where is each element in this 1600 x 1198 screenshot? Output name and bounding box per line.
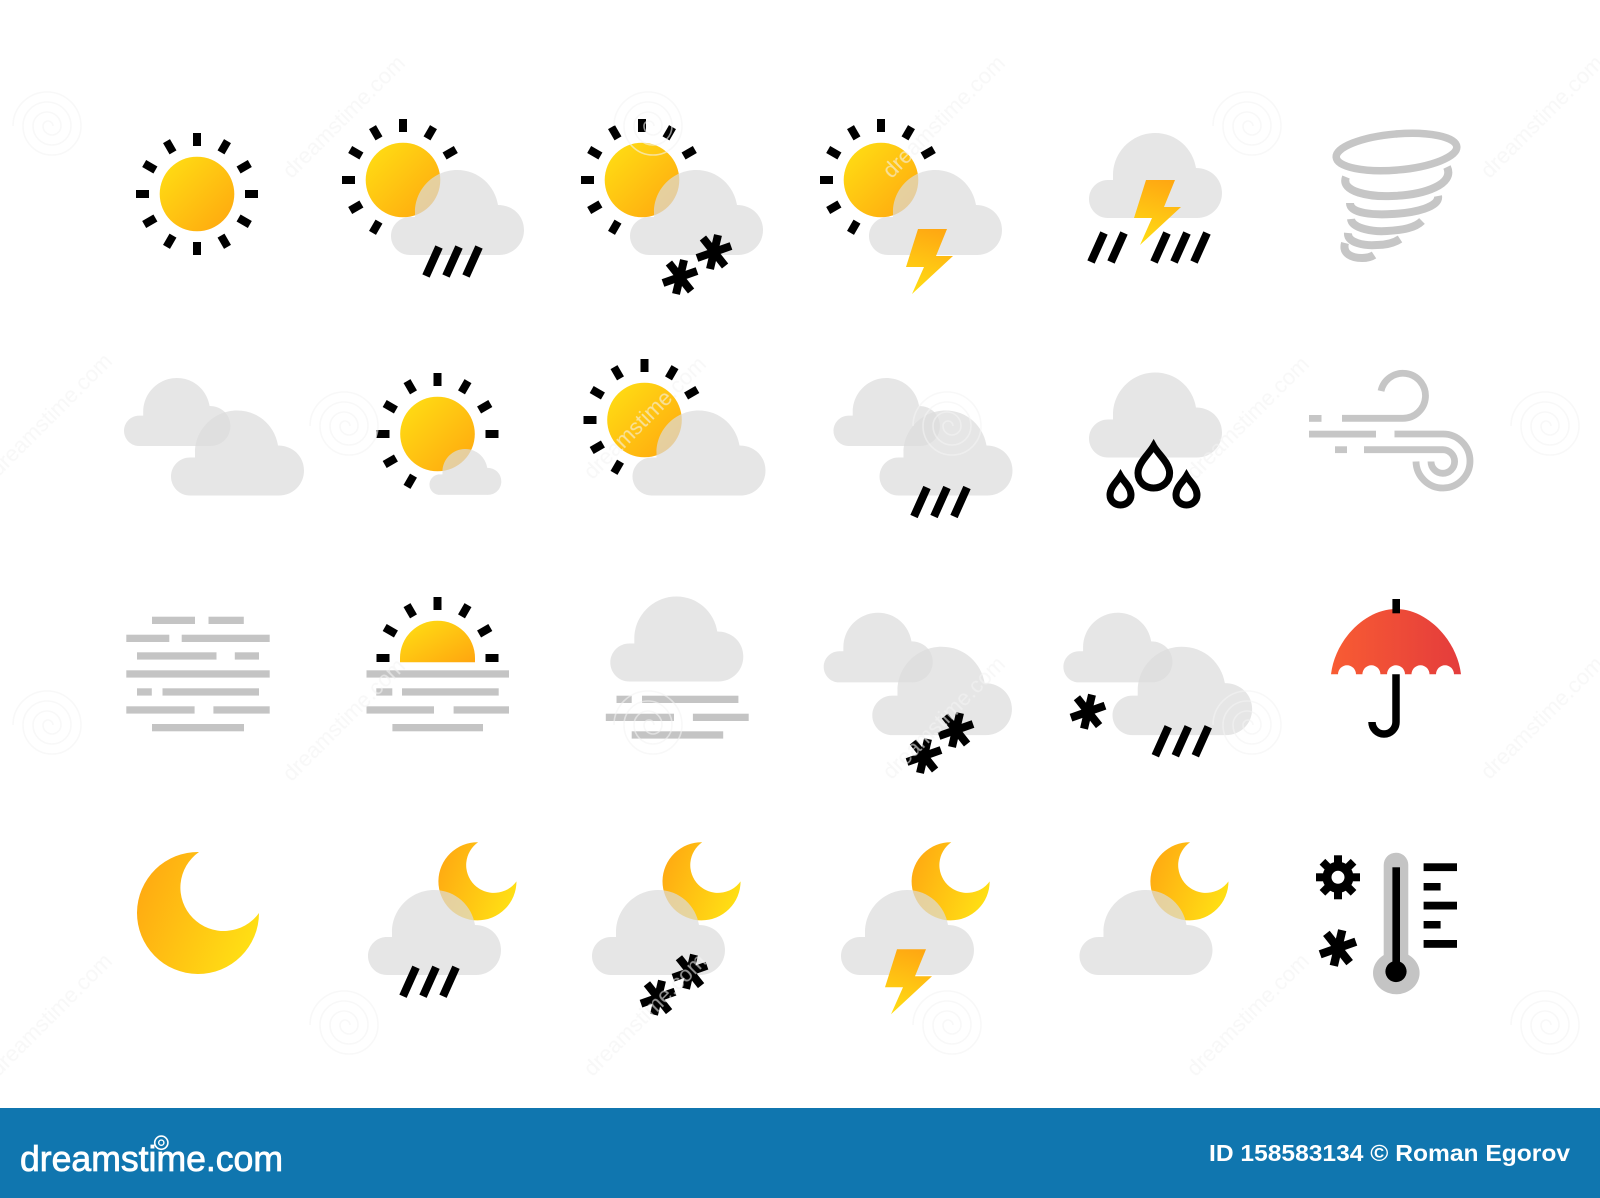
watermarks: dreamstime.com — [578, 351, 711, 484]
icon: sun behind cloud with snow — [581, 119, 763, 294]
icon: crescent moon — [137, 852, 259, 974]
icon: thunderstorm with rain — [1089, 133, 1222, 262]
icon: umbrella — [1331, 599, 1461, 734]
watermarks: dreamstime.com — [877, 651, 1010, 784]
watermarks: dreamstime.com — [1181, 351, 1314, 484]
icon: cloud with rain drops — [1089, 372, 1222, 505]
icon: moon behind cloud — [1080, 842, 1228, 975]
footer logo: dreamstime.com: dreamstime.com — [20, 1138, 283, 1179]
icon: sun behind cloud with rain — [342, 119, 524, 276]
icon: sun with small cloud — [376, 373, 501, 495]
icon: cloud over fog — [606, 596, 749, 739]
footer credit text: ID 158583134 © Roman Egorov — [1209, 1140, 1570, 1166]
icon: moon behind cloud with lightning — [841, 842, 990, 1014]
watermarks: dreamstime.com — [277, 653, 410, 786]
icon: sun — [136, 133, 258, 255]
icon: fog — [126, 617, 270, 731]
icon: sun behind cloud with lightning — [820, 119, 1002, 294]
icon: sun behind large cloud — [584, 359, 766, 496]
watermarks: dreamstime.com — [877, 50, 1010, 183]
icon: sunrise over fog — [366, 597, 509, 731]
icon: tornado — [1335, 129, 1458, 258]
icon: moon behind cloud with snow — [592, 842, 741, 1015]
icon: two clouds with snow — [824, 613, 1012, 773]
icon: moon behind cloud with rain — [368, 842, 516, 996]
footer band — [0, 1108, 1600, 1198]
icon: two clouds with rain — [834, 378, 1012, 516]
icon: two clouds with snow and rain — [1063, 613, 1252, 756]
icon: two clouds — [124, 378, 304, 496]
icon: wind — [1309, 373, 1470, 488]
watermarks: dreamstime.com — [277, 50, 410, 183]
icon: thermometer with sun and snow symbols — [1316, 853, 1457, 994]
watermarks: dreamstime.com — [578, 948, 711, 1081]
watermarks: dreamstime.com — [1181, 948, 1314, 1081]
